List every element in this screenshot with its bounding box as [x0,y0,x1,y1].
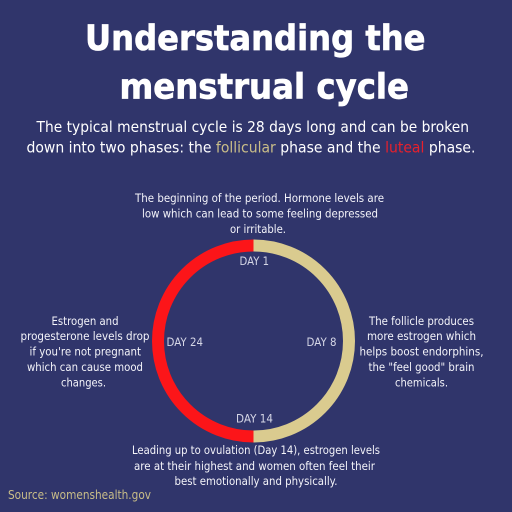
label: day 24: DAY 24 [166,335,203,349]
text: day 8 description [360,314,484,390]
title: Understanding the [85,19,426,59]
text: day 14 description [132,443,380,488]
text: day 8 description: more estrogen which [367,329,476,343]
cycle ring chart [158,246,349,436]
label: day 8: DAY 8 [306,335,336,349]
text: day 24 description [20,314,150,390]
intro text [26,118,476,156]
text: day 14 description: Leading up to ovulation (Day 14), estrogen levels [132,443,380,457]
text: day 24 description: if you're not pregnant [30,344,141,358]
text: day 8 description: the "feel good" brain [368,360,474,374]
text: day 8 description: chemicals. [395,376,448,390]
title: menstrual cycle [120,68,409,108]
text: day 24 description: Estrogen and [52,314,118,328]
text: day 1 description [134,191,384,236]
intro text: The typical menstrual cycle is 28 days long and can be broken [36,118,469,136]
intro text: down into two phases: the follicular phase and the luteal phase. [26,138,476,156]
text: day 24 description: which can cause mood [27,360,143,374]
text: day 1 description: or irritable. [230,222,286,236]
text: day 14 description: are at their highest and women often feel their [134,459,375,473]
text: day 8 description: The follicle produces [368,314,474,328]
text: day 1 description: The beginning of the period. Hormone levels are [134,191,384,205]
text: day 1 description: low which can lead to some feeling depressed [142,206,378,220]
text: day 14 description: best emotionally and physically. [174,474,338,488]
text: day 8 description: helps boost endorphins, [360,344,484,358]
title [85,19,426,108]
label: day 1: DAY 1 [240,254,269,268]
text: day 24 description: progesterone levels drop [20,329,150,343]
text: day 24 description: changes. [61,376,106,390]
label: day 14: DAY 14 [236,412,273,426]
source credit: Source: womenshealth.gov [8,487,152,502]
